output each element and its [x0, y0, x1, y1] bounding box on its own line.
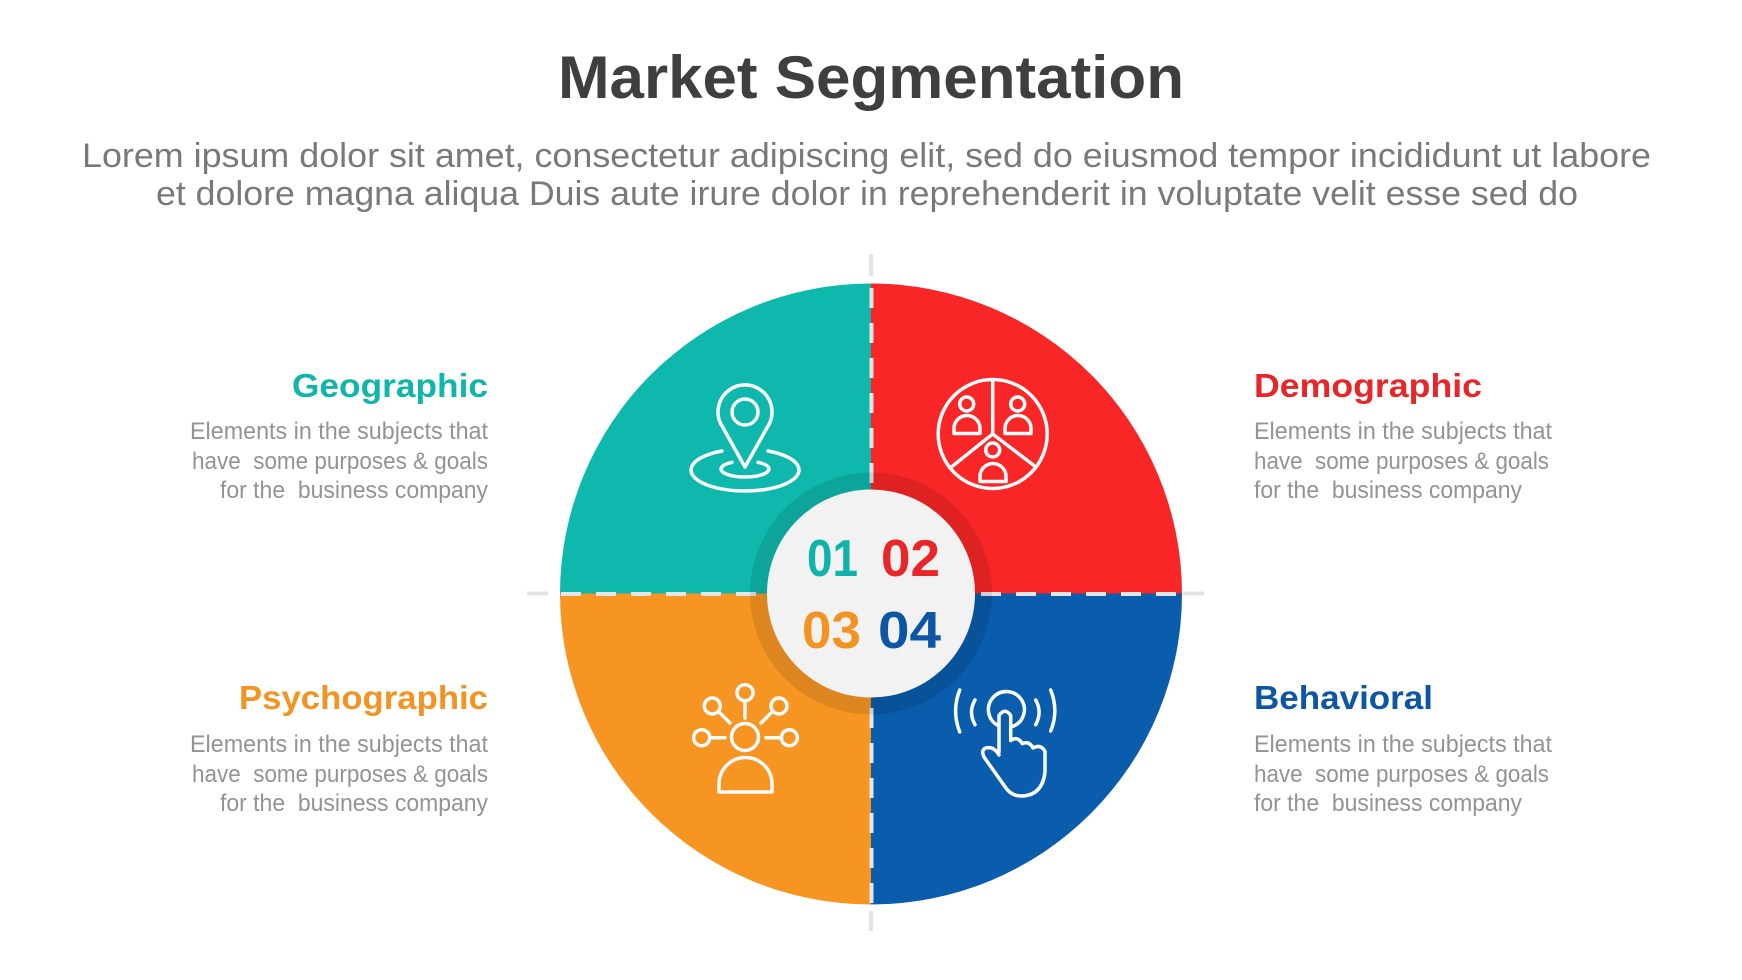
description: behavioral: Elements in the subjects that [1254, 731, 1552, 758]
circular segmented chart [527, 254, 1204, 931]
number 04: 04 [878, 602, 941, 660]
description: geographic: have some purposes & goals [192, 448, 488, 475]
subtitle text block: et dolore magna aliqua Duis aute irure dolor in reprehenderit in voluptate velit esse sed do [156, 175, 1578, 213]
icon: people in pie [938, 380, 1047, 488]
heading: geographic: Geographic [292, 367, 488, 404]
description: demographic: Elements in the subjects that [1254, 418, 1552, 445]
number 02: 02 [881, 530, 940, 588]
description: psychographic: have some purposes & goals [192, 761, 488, 788]
description: psychographic [190, 731, 488, 817]
description: demographic: have some purposes & goals [1254, 448, 1549, 475]
segment: behavioral [871, 594, 1182, 904]
panel: demographic [1254, 367, 1552, 504]
description: geographic [190, 418, 488, 504]
heading: demographic: Demographic [1254, 367, 1482, 404]
description: behavioral: have some purposes & goals [1254, 761, 1549, 788]
subtitle text block [82, 137, 1651, 213]
description: behavioral [1254, 731, 1552, 817]
center dark ring [750, 472, 992, 714]
description: geographic: Elements in the subjects that [190, 418, 488, 445]
panel: geographic [190, 367, 488, 504]
dashed dividers [561, 288, 1182, 904]
description: psychographic: Elements in the subjects that [190, 731, 488, 758]
subtitle text block: Lorem ipsum dolor sit amet, consectetur adipiscing elit, sed do eiusmod tempor incididunt ut labore [82, 137, 1651, 175]
description: demographic: for the business company [1254, 477, 1522, 504]
segment: geographic [560, 284, 871, 594]
number 03: 03 [802, 602, 861, 660]
description: geographic: for the business company [220, 477, 488, 504]
description: psychographic: for the business company [220, 790, 488, 817]
heading: behavioral: Behavioral [1254, 679, 1433, 716]
number 01: 01 [807, 530, 858, 588]
icon: person with network nodes [694, 685, 797, 792]
icon: location pin [691, 385, 799, 491]
heading: psychographic: Psychographic [239, 679, 488, 716]
panel: behavioral [1254, 679, 1552, 817]
panel: psychographic [190, 679, 488, 817]
segment: demographic [871, 284, 1182, 594]
segment: psychographic [560, 594, 871, 904]
axis tick marks [527, 254, 1204, 931]
center disc [767, 490, 975, 698]
title: Market Segmentation [558, 44, 1184, 111]
description: behavioral: for the business company [1254, 790, 1522, 817]
description: demographic [1254, 418, 1552, 504]
icon: pointing hand with touch waves [956, 690, 1055, 796]
